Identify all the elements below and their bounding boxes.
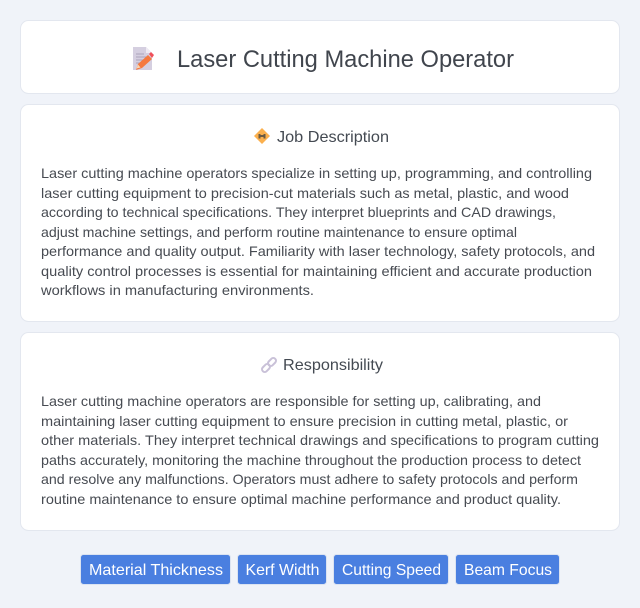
panel: title header xyxy=(20,20,620,94)
tag: cutting speed: Cutting Speed xyxy=(342,562,441,579)
text block: responsibility xyxy=(41,393,599,507)
text block: job description: adjust machine settings, and perform routine maintenance to ensure optimal xyxy=(41,224,517,240)
text block: responsibility: paths accurately, monitoring the machine throughout the production process to detect xyxy=(41,452,581,468)
tag: material thickness xyxy=(80,554,230,584)
text block: responsibility: routine maintenance to ensure optimal machine performance and product quality. xyxy=(41,491,561,507)
tag: cutting speed xyxy=(334,554,448,584)
text block: job description: laser cutting equipment to precision-cut materials such as metal, plastic, and wood xyxy=(41,185,569,201)
text block: responsibility: maintaining laser cutting equipment to ensure precision in cutting metal, plastic, or xyxy=(41,413,568,429)
text block: job description: quality control processes is essential for maintaining efficient and accurate production xyxy=(41,263,592,279)
heading: responsibility: Responsibility xyxy=(283,357,383,374)
tag: kerf width: Kerf Width xyxy=(246,562,320,579)
panel: job description xyxy=(20,104,620,322)
tag: beam focus: Beam Focus xyxy=(464,562,552,579)
text block: job description: performance and quality output. Familiarity with laser technology, safety protocols, and xyxy=(41,243,595,259)
panel: responsibility xyxy=(20,332,620,530)
text block: job description: according to technical specifications. They interpret blueprints and CAD drawings, xyxy=(41,204,556,220)
icon: chain link xyxy=(261,357,277,373)
text block: job description: workflows in manufacturing environments. xyxy=(40,282,314,298)
tag: material thickness: Material Thickness xyxy=(89,562,223,579)
text block: responsibility: and resolve any malfunctions. Operators must adhere to safety protocols and perform xyxy=(41,471,578,487)
tag: kerf width xyxy=(238,554,326,584)
text block: responsibility: other materials. They interpret technical drawings and specifications to program cutting xyxy=(41,432,599,448)
text block: job description: Laser cutting machine operators specialize in setting up, programming, and controlling xyxy=(41,165,592,181)
text block: job description xyxy=(40,165,595,298)
tags row xyxy=(80,554,560,584)
text block: responsibility: Laser cutting machine operators are responsible for setting up, calibrating, and xyxy=(41,393,541,409)
tag: beam focus xyxy=(456,554,560,584)
icon: orange diamond sign xyxy=(254,128,270,144)
title: Laser Cutting Machine Operator xyxy=(177,46,514,73)
icon: document with pencil xyxy=(133,47,154,70)
heading: job description: Job Description xyxy=(277,129,389,146)
